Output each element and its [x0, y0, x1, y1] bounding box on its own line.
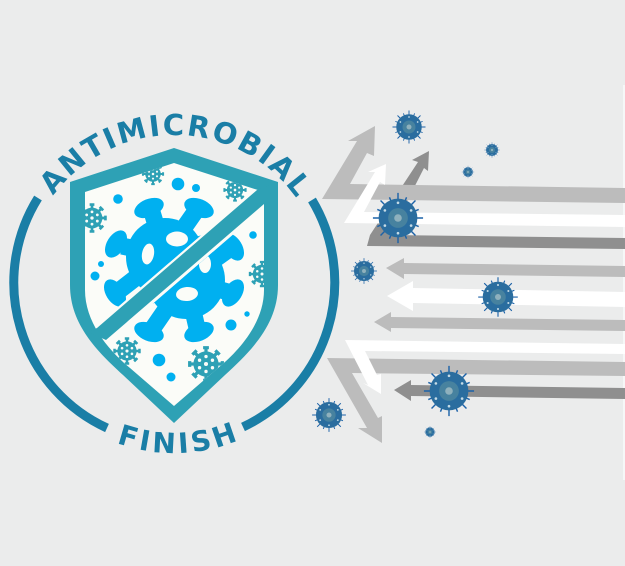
badge ring left arc — [14, 198, 107, 428]
virus 4 — [373, 193, 423, 243]
large virus upper half — [104, 198, 214, 306]
virus 8 — [312, 398, 346, 432]
arrow: white upward — [344, 164, 625, 227]
virus 3 — [462, 166, 474, 178]
arrow: light grey left, top — [386, 258, 625, 279]
arrow: light grey downward — [327, 358, 625, 443]
arrow: dark grey upward — [367, 151, 625, 249]
small teal viruses — [79, 164, 274, 380]
title: FINISH: FINISH — [118, 422, 236, 454]
virus 6 — [478, 277, 518, 317]
shield diagonal band — [88, 182, 278, 340]
arrow: light grey left, middle — [374, 312, 625, 332]
shield contents — [79, 164, 274, 382]
shield — [70, 148, 278, 423]
virus 5 — [351, 258, 377, 284]
blue dots — [90, 178, 257, 382]
arrow: dark grey left — [394, 380, 625, 401]
shield outer — [70, 148, 278, 423]
arrow: white left — [387, 281, 625, 311]
arrow: white downward — [345, 340, 625, 394]
title: ANTIMICROBIAL: ANTIMICROBIAL — [42, 114, 306, 198]
right edge strip — [623, 85, 625, 480]
large virus lower half — [134, 234, 244, 342]
virus 7 — [424, 366, 474, 416]
arrow: light grey upward — [322, 126, 625, 203]
virus 2 — [484, 142, 500, 158]
virus 9 — [424, 426, 436, 438]
virus 1 — [392, 110, 426, 144]
badge ring right arc — [243, 200, 335, 427]
shield inner — [85, 163, 264, 406]
flying viruses — [312, 110, 518, 438]
